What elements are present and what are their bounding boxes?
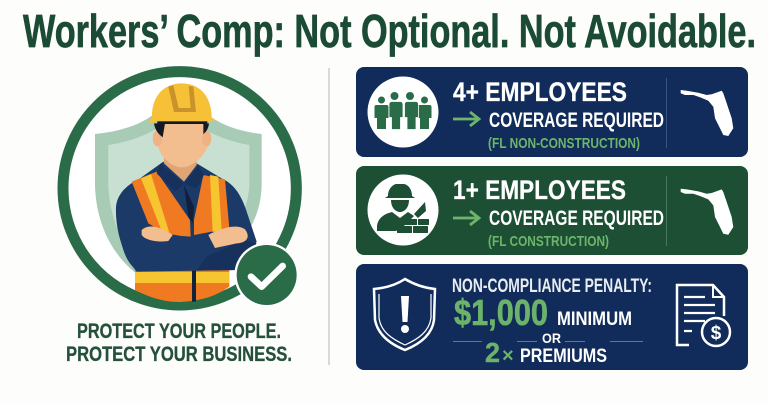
worker figure <box>116 83 257 302</box>
text: scope: (FL NON-CONSTRUCTION) <box>488 135 640 152</box>
icon: construction worker with bricks <box>368 174 438 246</box>
text: dollar sign: $ <box>711 323 722 344</box>
panel: 1+ employees <box>356 166 748 255</box>
tagline: PROTECT YOUR PEOPLE. <box>77 320 281 343</box>
panel: penalty: × <box>502 345 514 367</box>
icon: group of people <box>368 76 438 148</box>
lower vest <box>135 260 229 302</box>
hair <box>154 123 165 137</box>
icon: Florida map <box>681 90 733 136</box>
neck <box>164 155 197 182</box>
vest right <box>194 175 229 235</box>
heading: 1+ EMPLOYEES <box>453 175 626 205</box>
collar and placket <box>157 163 184 192</box>
divider <box>328 68 330 365</box>
arms crossed <box>119 223 212 272</box>
text: premiums: PREMIUMS <box>520 346 607 367</box>
icon: check badge <box>234 243 299 307</box>
icon: green ring <box>63 72 296 305</box>
text: amount: $1,000 <box>454 292 548 333</box>
hands <box>142 226 173 241</box>
text: 2x: 2 <box>485 337 500 368</box>
text: coverage required: COVERAGE REQUIRED <box>489 207 664 230</box>
icon: Florida map <box>681 189 733 235</box>
text: scope: (FL CONSTRUCTION) <box>488 233 609 250</box>
panel: penalty <box>356 264 748 370</box>
icon: invoice with dollar <box>677 285 730 346</box>
icon: warning shield <box>374 279 435 350</box>
text: penalty label: NON-COMPLIANCE PENALTY: <box>452 276 652 297</box>
head <box>157 122 208 167</box>
heading: 4+ EMPLOYEES <box>453 77 627 107</box>
text: or: OR <box>542 330 561 346</box>
icon: arrow <box>453 112 479 126</box>
torso and shirt <box>116 162 257 272</box>
text: minimum: MINIMUM <box>557 309 632 330</box>
hard hat <box>149 83 215 123</box>
icon: shield backdrop <box>95 113 262 277</box>
tagline: PROTECT YOUR BUSINESS. <box>66 343 292 366</box>
tagline <box>66 320 292 366</box>
icon: arrow <box>453 211 479 225</box>
text: coverage required: COVERAGE REQUIRED <box>489 109 664 132</box>
vest left <box>132 172 191 237</box>
panel: worker illustration <box>63 72 299 307</box>
panel: 4+ employees <box>356 67 748 157</box>
